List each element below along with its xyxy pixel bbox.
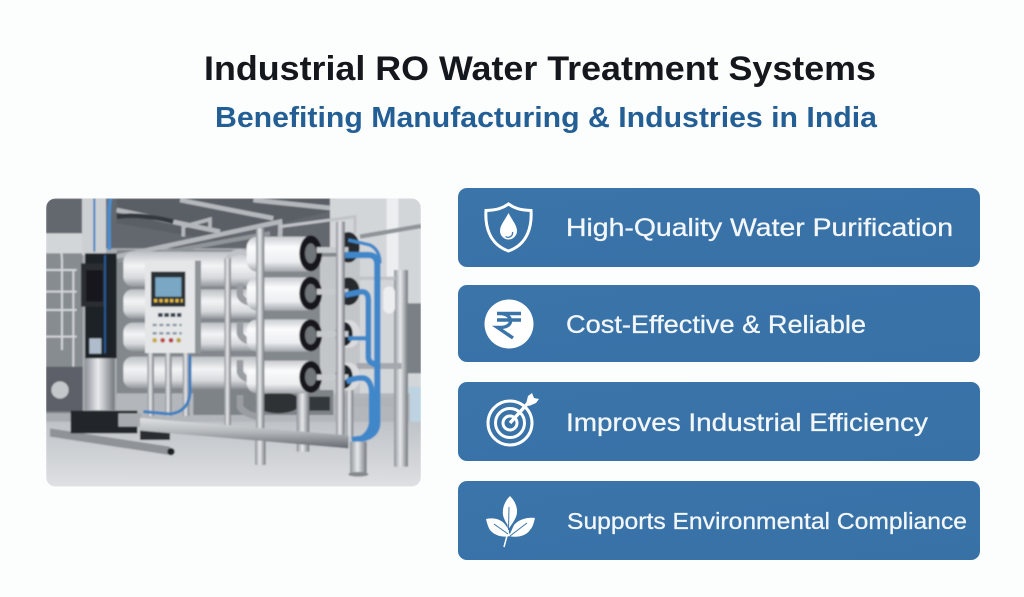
panel: Supports Environmental Compliance bbox=[458, 481, 980, 560]
label: Cost-Effective & Reliable bbox=[566, 311, 866, 339]
icon: rupee coin bbox=[484, 300, 534, 348]
icon: shield with water drop bbox=[486, 204, 531, 251]
control panel bbox=[145, 261, 201, 353]
panel: Cost-Effective & Reliable bbox=[458, 285, 980, 362]
shadowed area behind vessels bbox=[117, 250, 337, 397]
subtitle: Benefiting Manufacturing & Industries in India bbox=[215, 102, 878, 134]
back membrane tubes bbox=[123, 252, 263, 287]
panel: Improves Industrial Efficiency bbox=[458, 382, 980, 461]
vessels bbox=[247, 237, 318, 272]
panel: High-Quality Water Purification bbox=[458, 188, 980, 267]
pump and dark panel bbox=[85, 253, 117, 358]
blue piping bbox=[345, 255, 377, 440]
label: High-Quality Water Purification bbox=[566, 214, 953, 242]
header pipe bbox=[140, 418, 348, 448]
elbows bbox=[228, 252, 253, 260]
title: Industrial RO Water Treatment Systems bbox=[204, 50, 876, 88]
label: Improves Industrial Efficiency bbox=[566, 409, 929, 437]
panel: photo of industrial RO system bbox=[46, 198, 421, 487]
icon: three-leaf plant bbox=[486, 496, 535, 547]
label: Supports Environmental Compliance bbox=[567, 508, 967, 534]
icon: target with arrow bbox=[488, 393, 539, 445]
